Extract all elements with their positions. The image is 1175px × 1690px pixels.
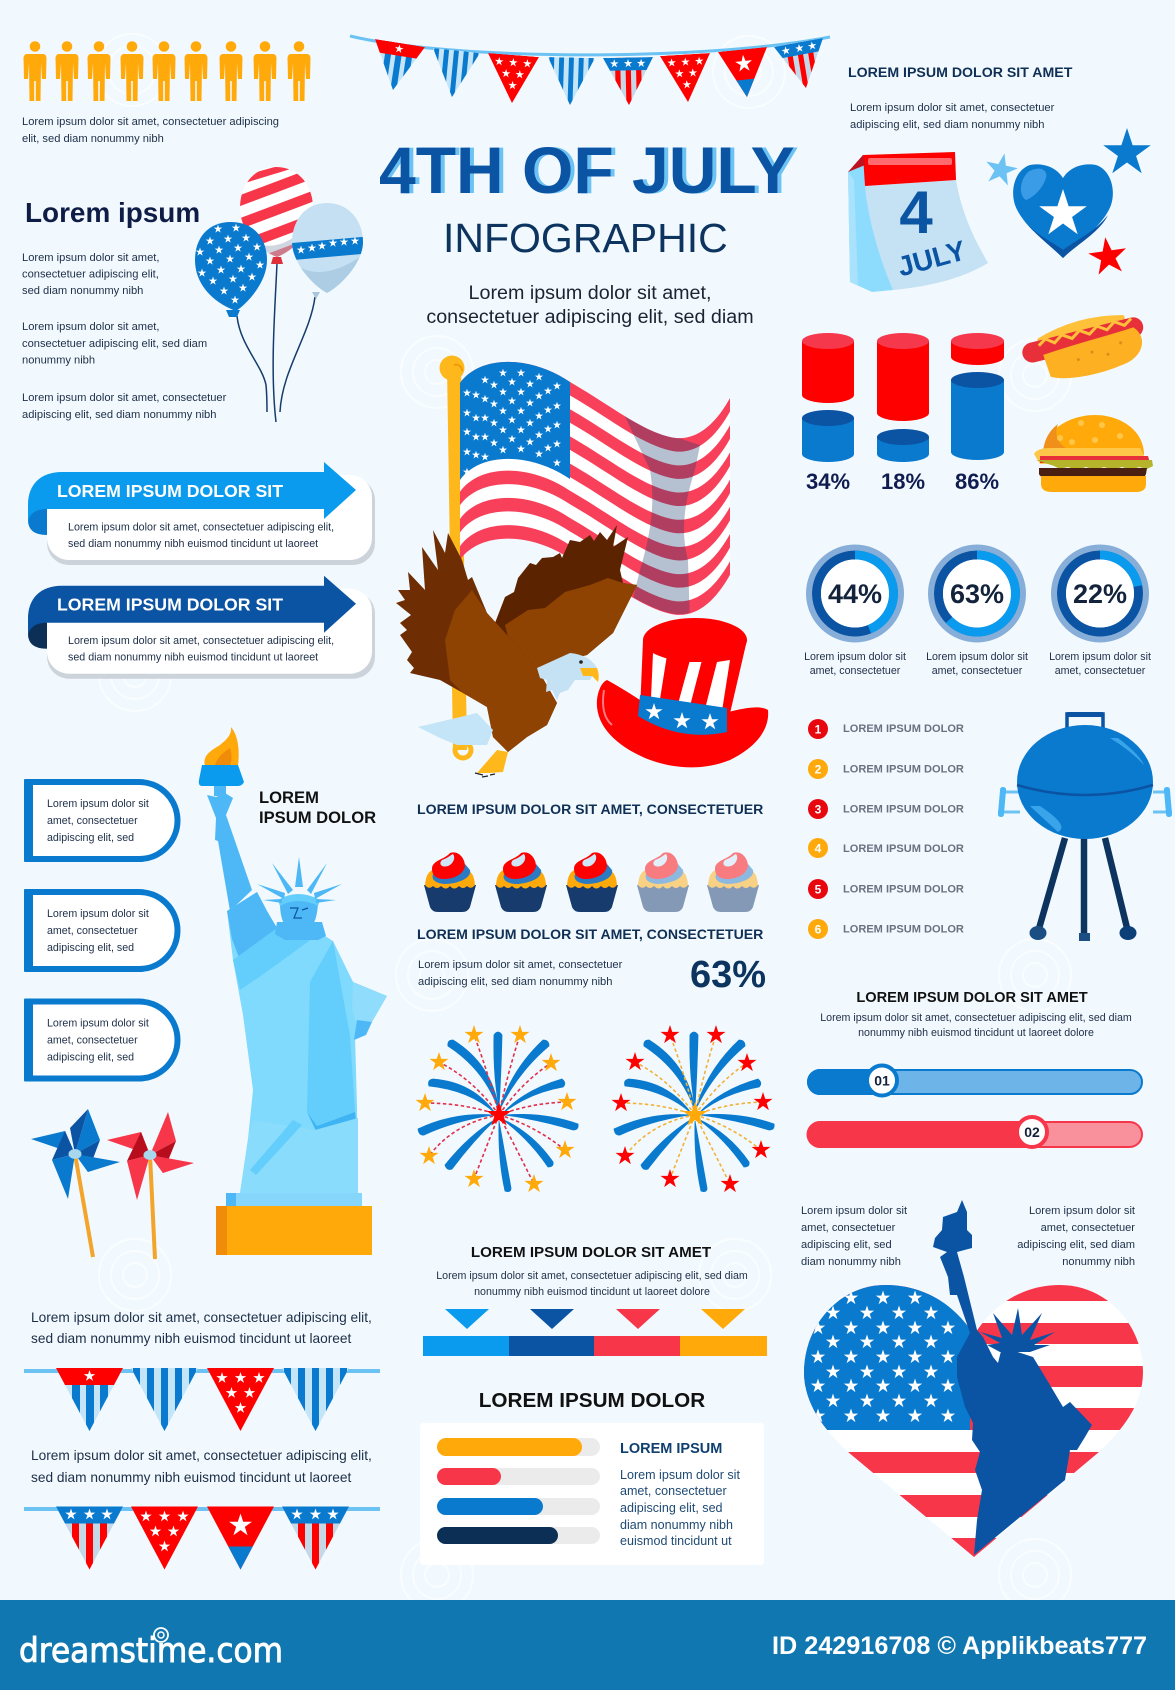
heading: progress panel: LOREM IPSUM DOLOR (479, 1389, 705, 1412)
rounded text box 2 (24, 889, 178, 972)
bunting garland top (350, 36, 830, 106)
firework right (611, 1025, 774, 1192)
heart text right (1017, 1205, 1135, 1268)
percent block text: Lorem ipsum dolor sit amet, consectetuer (418, 959, 623, 971)
heart text left: Lorem ipsum dolor sit (801, 1205, 907, 1217)
left text blocks: Lorem ipsum dolor sit amet, (22, 321, 159, 333)
intro text (426, 282, 754, 328)
illustration: waving flag on pole (440, 356, 730, 758)
donut 63% (931, 548, 1023, 640)
donut 22%: 22% (1073, 579, 1127, 609)
banner 2: sed diam nonummy nibh euismod tincidunt ut laoreet (68, 652, 318, 664)
people icons row (24, 41, 310, 101)
icon: kettle grill (998, 712, 1172, 941)
banner 1: LOREM IPSUM DOLOR SIT (57, 481, 283, 501)
top right heading: LOREM IPSUM DOLOR SIT AMET (848, 65, 1073, 81)
title: 4TH OF JULY (379, 133, 795, 207)
cylinder 18%: 18% (881, 469, 925, 494)
illustration: flag heart with statue silhouette (800, 1200, 1150, 1560)
percent block text (418, 959, 623, 988)
left text blocks: nonummy nibh (22, 354, 95, 366)
heart text left: amet, consectetuer (801, 1222, 896, 1234)
heart text right: nonummy nibh (1062, 1256, 1135, 1268)
intro text: consectetuer adipiscing elit, sed diam (426, 306, 754, 328)
firework left (415, 1025, 578, 1192)
bunting text 1: Lorem ipsum dolor sit amet, consectetuer adipiscing elit, (31, 1310, 372, 1325)
panel: progress bars (420, 1423, 764, 1565)
slider 02 (806, 1117, 1142, 1148)
sliders text: Lorem ipsum dolor sit amet, consectetuer adipiscing elit, sed diam (820, 1012, 1132, 1024)
banner 1 (28, 462, 375, 565)
rounded text box 3: Lorem ipsum dolor sit (47, 1018, 149, 1030)
numbered list: 3 (815, 802, 822, 816)
segment bar with pointers (423, 1309, 767, 1356)
cupcake icons (424, 852, 759, 912)
intro text: Lorem ipsum dolor sit amet, (469, 282, 711, 304)
numbered list: LOREM IPSUM DOLOR (843, 723, 964, 735)
panel: progress bars: diam nonummy nibh (620, 1518, 733, 1532)
donut 44% (809, 548, 901, 640)
donut captions: Lorem ipsum dolor sit (1049, 651, 1151, 663)
bunting text 2: sed diam nonummy nibh euismod tincidunt ut laoreet (31, 1470, 352, 1485)
donut captions: Lorem ipsum dolor sit (804, 651, 906, 663)
numbered list: 4 (815, 842, 822, 856)
donut captions: amet, consectetuer (1055, 665, 1146, 677)
icon: balloons (195, 160, 366, 422)
icon: calendar: 4 (899, 179, 933, 246)
segment bar text: Lorem ipsum dolor sit amet, consectetuer adipiscing elit, sed diam (436, 1270, 748, 1282)
numbered list: LOREM IPSUM DOLOR (843, 924, 964, 936)
left text blocks: Lorem ipsum dolor sit amet, consectetuer (22, 392, 227, 404)
panel: progress bars: Lorem ipsum dolor sit (620, 1468, 740, 1482)
panel: progress bars: LOREM IPSUM (620, 1441, 722, 1457)
cylinder 34% (802, 333, 854, 494)
icon: burger (1034, 415, 1153, 492)
heart text right: adipiscing elit, sed diam (1017, 1239, 1135, 1251)
rounded text box 1: adipiscing elit, sed (47, 832, 134, 844)
left text blocks (22, 252, 227, 421)
cylinder 86%: 86% (955, 469, 999, 494)
rounded text box 1: amet, consectetuer (47, 815, 138, 827)
icon: blue pinwheel (31, 1109, 120, 1257)
rounded text box 2: adipiscing elit, sed (47, 942, 134, 954)
bunting row 2 (24, 1506, 380, 1570)
panel: progress bars: amet, consectetuer (620, 1484, 727, 1498)
donut 63%: 63% (950, 579, 1004, 609)
left text blocks: Lorem ipsum dolor sit amet, (22, 252, 159, 264)
donut captions (804, 651, 1151, 677)
left text blocks: sed diam nonummy nibh (22, 285, 143, 297)
banner 2 (28, 576, 375, 679)
numbered list: LOREM IPSUM DOLOR (843, 764, 964, 776)
heart text left: adipiscing elit, sed (801, 1239, 892, 1251)
slider 01: 01 (874, 1072, 890, 1088)
panel: progress bars: euismod tincidunt ut (620, 1534, 732, 1548)
subtitle: INFOGRAPHIC (443, 215, 728, 261)
rounded text box 3 (24, 998, 178, 1082)
numbered list: LOREM IPSUM DOLOR (843, 884, 964, 896)
slider 01 (807, 1066, 1142, 1096)
rounded text box 1: Lorem ipsum dolor sit (47, 798, 149, 810)
bunting text 2 (31, 1448, 372, 1485)
banner 2: Lorem ipsum dolor sit amet, consectetuer adipiscing elit, (68, 635, 334, 647)
top right text: Lorem ipsum dolor sit amet, consectetuer (850, 102, 1055, 114)
donut captions: Lorem ipsum dolor sit (926, 651, 1028, 663)
heart text right: Lorem ipsum dolor sit (1029, 1205, 1135, 1217)
footer credit: ID 242916708 © Applikbeats777 (772, 1632, 1147, 1660)
left text blocks: consectetuer adipiscing elit, (22, 268, 159, 280)
donut charts (804, 548, 1151, 677)
icon: heart with stars (982, 128, 1151, 276)
rounded text box 2: Lorem ipsum dolor sit (47, 908, 149, 920)
donut captions: amet, consectetuer (810, 665, 901, 677)
cylinder 18% (877, 333, 929, 494)
donut captions: amet, consectetuer (932, 665, 1023, 677)
people caption (22, 116, 279, 145)
numbered list: LOREM IPSUM DOLOR (843, 804, 964, 816)
statue label: IPSUM DOLOR (259, 808, 376, 827)
segment bar text (436, 1270, 748, 1298)
donut 22% (1054, 548, 1146, 640)
cylinder 86% (951, 333, 1004, 494)
icon: red pinwheel (107, 1112, 194, 1259)
top right text: adipiscing elit, sed diam nonummy nibh (850, 119, 1044, 131)
flag pole (440, 356, 471, 758)
numbered list (808, 719, 964, 939)
icon: calendar (848, 152, 988, 292)
top right text (850, 102, 1055, 131)
heart text left: diam nonummy nibh (801, 1256, 901, 1268)
numbered list: 2 (815, 762, 822, 776)
numbered list: LOREM IPSUM DOLOR (843, 843, 964, 855)
illustration: uncle sam hat (597, 618, 768, 767)
heading: sliders: LOREM IPSUM DOLOR SIT AMET (856, 990, 1088, 1006)
footer bar (0, 1600, 1175, 1690)
sliders text (820, 1012, 1132, 1039)
footer logo: dreamstime.com (19, 1631, 283, 1671)
statue label (259, 788, 376, 827)
percent block text: adipiscing elit, sed diam nonummy nibh (418, 976, 612, 988)
numbered list: 6 (815, 922, 822, 936)
bunting text 1: sed diam nonummy nibh euismod tincidunt ut laoreet (31, 1331, 352, 1346)
segment bar text: nonummy nibh euismod tincidunt ut laoreet dolore (474, 1286, 710, 1298)
statue label: LOREM (259, 788, 319, 807)
banner 1: Lorem ipsum dolor sit amet, consectetuer adipiscing elit, (68, 522, 334, 534)
left text blocks: adipiscing elit, sed diam nonummy nibh (22, 409, 216, 421)
donut 44%: 44% (828, 579, 882, 609)
icon: calendar: JULY (894, 235, 969, 282)
flag (460, 362, 730, 625)
people caption: Lorem ipsum dolor sit amet, consectetuer adipiscing (22, 116, 279, 128)
people caption: elit, sed diam nonummy nibh (22, 133, 164, 145)
illustration: bald eagle (396, 525, 637, 777)
icon: statue of liberty (199, 727, 387, 1255)
banner 2: LOREM IPSUM DOLOR SIT (57, 595, 283, 615)
icon: hot dog (1018, 306, 1152, 390)
slider 02: 02 (1024, 1124, 1040, 1140)
heading: cupcakes: LOREM IPSUM DOLOR SIT AMET, CONSECTETUER (417, 801, 763, 817)
heart text right: amet, consectetuer (1041, 1222, 1135, 1234)
panel: progress bars: adipiscing elit, sed (620, 1501, 723, 1515)
rounded text box 1 (24, 779, 178, 862)
left text blocks: consectetuer adipiscing elit, sed diam (22, 338, 207, 350)
big percent 63%: 63% (690, 954, 766, 996)
bunting text 1 (31, 1310, 372, 1346)
numbered list: 1 (815, 722, 822, 736)
bunting text 2: Lorem ipsum dolor sit amet, consectetuer adipiscing elit, (31, 1448, 372, 1463)
rounded text box 3: adipiscing elit, sed (47, 1052, 134, 1064)
rounded text box 3: amet, consectetuer (47, 1034, 138, 1046)
heading: percent block: LOREM IPSUM DOLOR SIT AMET, CONSECTETUER (417, 926, 763, 942)
banner 1: sed diam nonummy nibh euismod tincidunt ut laoreet (68, 538, 318, 550)
heading: segment bar: LOREM IPSUM DOLOR SIT AMET (471, 1244, 712, 1261)
chart: cylinder bars (802, 333, 1004, 494)
rounded text box 2: amet, consectetuer (47, 925, 138, 937)
bunting row 1 (24, 1368, 380, 1431)
numbered list: 5 (815, 882, 822, 896)
heading: Lorem ipsum: Lorem ipsum (25, 197, 200, 228)
cylinder 34%: 34% (806, 469, 850, 494)
heart text left (801, 1205, 907, 1268)
sliders text: nonummy nibh euismod tincidunt ut laoreet dolore (858, 1027, 1094, 1039)
title: 4TH OF JULY (383, 133, 799, 207)
